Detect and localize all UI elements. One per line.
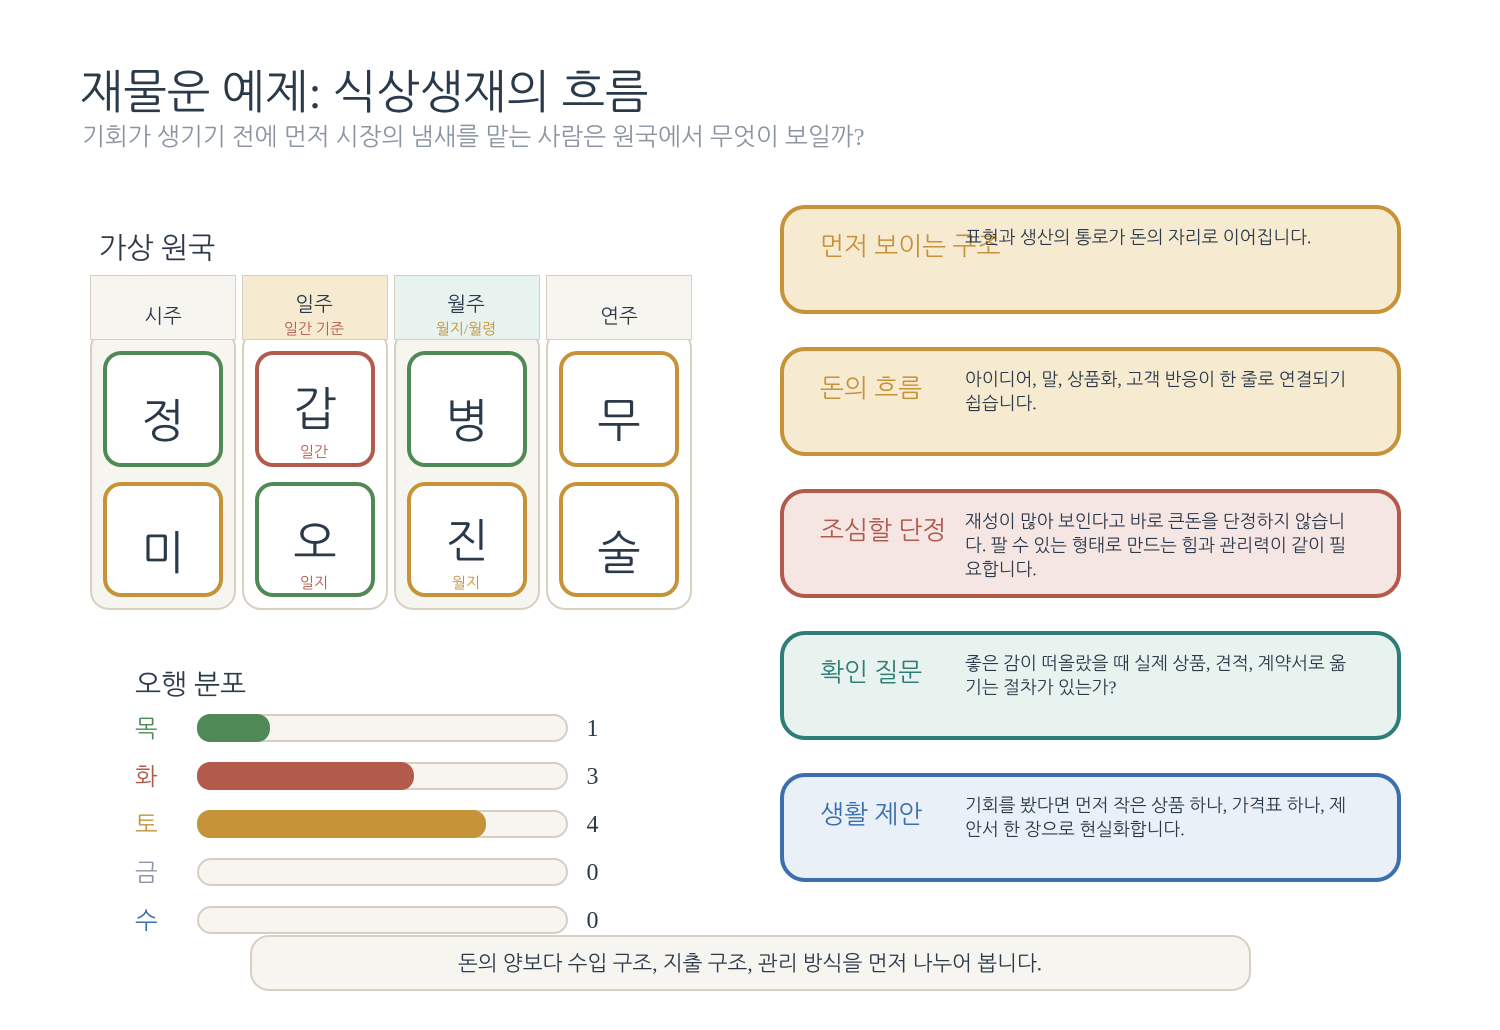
panel: 연주 column: 연주 xyxy=(600,306,638,328)
bar: 금: 금 xyxy=(135,861,158,887)
card: 술 xyxy=(561,484,677,595)
panel: 일주 column xyxy=(242,276,388,609)
heading: 오행 분포: 오행 분포 xyxy=(135,669,246,700)
subtitle: 기회가 생기기 전에 먼저 시장의 냄새를 맡는 사람은 원국에서 무엇이 보일까? xyxy=(82,124,865,151)
card: 술: 술 xyxy=(597,528,641,579)
card: 미 xyxy=(105,484,221,595)
panel: 돈의 흐름 xyxy=(782,349,1399,454)
card: 무 xyxy=(561,353,677,465)
bar: 목 xyxy=(135,714,598,743)
bar: 금: 0 xyxy=(586,860,598,886)
bar: 목: 1 xyxy=(586,716,598,742)
panel: 확인 질문 xyxy=(782,633,1399,738)
card: 갑 xyxy=(257,353,373,465)
bar: 화: 3 xyxy=(586,764,598,790)
bar: 수 xyxy=(135,907,598,935)
panel: 시주 column xyxy=(90,276,236,609)
card: 정 xyxy=(105,353,221,465)
panel: 돈의 흐름: 쉽습니다. xyxy=(965,394,1037,414)
panel: 조심할 단정: 요합니다. xyxy=(965,560,1037,580)
callout: bottom note: 돈의 양보다 수입 구조, 지출 구조, 관리 방식을 먼저 나누어 봅니다. xyxy=(458,952,1042,976)
panel: 월주 column: 월지/월령 xyxy=(436,321,496,338)
bar: 토 xyxy=(135,810,598,839)
panel: 확인 질문: 기는 절차가 있는가? xyxy=(965,678,1116,698)
panel: 일주 column: 일간 기준 xyxy=(284,321,344,338)
panel: 돈의 흐름: 돈의 흐름 xyxy=(820,374,922,403)
panel: 조심할 단정: 다. 팔 수 있는 형태로 만드는 힘과 관리력이 같이 필 xyxy=(965,536,1346,556)
card: 갑: 갑 xyxy=(293,384,337,435)
panel: 먼저 보이는 구조: 표현과 생산의 통로가 돈의 자리로 이어집니다. xyxy=(965,228,1311,248)
card: 미: 미 xyxy=(141,528,185,579)
panel: 조심할 단정 xyxy=(782,491,1399,596)
card: 병: 병 xyxy=(445,396,489,447)
card: 진 xyxy=(409,484,525,595)
card: 무: 무 xyxy=(597,396,641,447)
bar: 수: 수 xyxy=(135,909,158,935)
panel: 조심할 단정: 조심할 단정 xyxy=(820,516,946,545)
heading: 가상 원국: 가상 원국 xyxy=(99,233,215,265)
panel: 생활 제안 xyxy=(782,775,1399,880)
panel: 월주 column xyxy=(394,276,540,609)
title: 재물운 예제: 식상생재의 흐름 xyxy=(80,67,648,118)
card: 오 xyxy=(257,484,373,595)
callout: bottom note xyxy=(251,936,1250,990)
panel: 시주 column: 시주 xyxy=(144,306,182,328)
panel: 생활 제안: 안서 한 장으로 현실화합니다. xyxy=(965,820,1185,840)
panel: 생활 제안: 기회를 봤다면 먼저 작은 상품 하나, 가격표 하나, 제 xyxy=(965,796,1346,816)
panel: 확인 질문: 좋은 감이 떠올랐을 때 실제 상품, 견적, 계약서로 옮 xyxy=(965,654,1346,674)
panel: 월주 column: 월주 xyxy=(447,294,485,316)
bar: 금 xyxy=(135,859,598,887)
panel: 연주 column xyxy=(546,276,692,609)
card: 병 xyxy=(409,353,525,465)
card: 오: 오 xyxy=(293,518,337,569)
panel: 조심할 단정: 재성이 많아 보인다고 바로 큰돈을 단정하지 않습니 xyxy=(965,512,1345,532)
card: 갑: 일간 xyxy=(300,444,328,461)
bar: 화 xyxy=(135,762,598,791)
bar: 수: 0 xyxy=(586,908,598,934)
panel: 일주 column: 일주 xyxy=(295,294,333,316)
card: 오: 일지 xyxy=(300,575,328,592)
card: 정: 정 xyxy=(141,396,185,447)
bar: 화: 화 xyxy=(135,765,158,791)
panel: 먼저 보이는 구조 xyxy=(782,207,1399,312)
panel: 돈의 흐름: 아이디어, 말, 상품화, 고객 반응이 한 줄로 연결되기 xyxy=(965,370,1346,390)
panel: 먼저 보이는 구조: 먼저 보이는 구조 xyxy=(820,232,1001,261)
card: 진: 진 xyxy=(445,516,489,567)
bar chart: 오행 분포 xyxy=(135,714,598,935)
card: 진: 월지 xyxy=(452,575,480,592)
panel: 확인 질문: 확인 질문 xyxy=(820,658,922,687)
bar: 목: 목 xyxy=(135,717,158,743)
bar: 토: 토 xyxy=(135,813,158,839)
bar: 토: 4 xyxy=(586,812,598,838)
panel: 생활 제안: 생활 제안 xyxy=(820,800,922,829)
